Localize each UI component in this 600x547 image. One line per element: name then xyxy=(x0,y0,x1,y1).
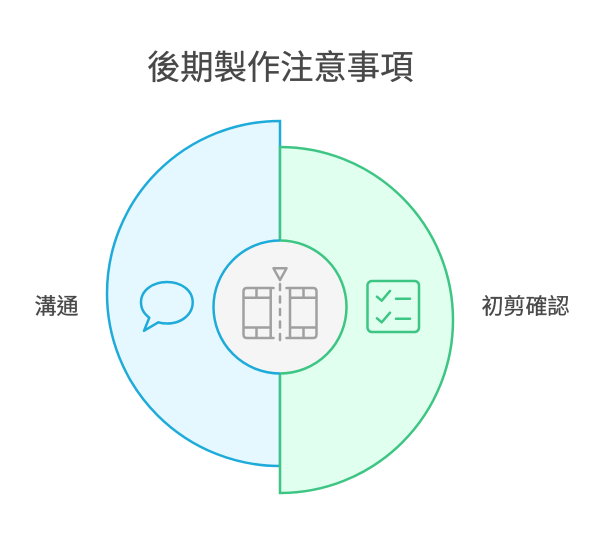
label: communication: 溝通 xyxy=(34,294,79,319)
icon: checklist xyxy=(368,281,419,332)
panel: first cut review half circle xyxy=(280,147,453,493)
icon: speech bubble xyxy=(141,282,193,331)
center circle right outline xyxy=(280,240,346,374)
icon part: dashed cut line xyxy=(279,284,281,345)
title: 後期製作注意事項 xyxy=(147,50,413,87)
icon part: right film strip xyxy=(286,288,316,338)
center circle left outline xyxy=(214,240,280,374)
panel: center circle xyxy=(214,240,346,374)
panel: communication half circle xyxy=(107,121,280,466)
icon: film cut xyxy=(244,268,316,345)
label: first cut review: 初剪確認 xyxy=(482,294,570,319)
icon part: marker triangle xyxy=(274,268,286,280)
icon part: left film strip xyxy=(244,288,274,338)
